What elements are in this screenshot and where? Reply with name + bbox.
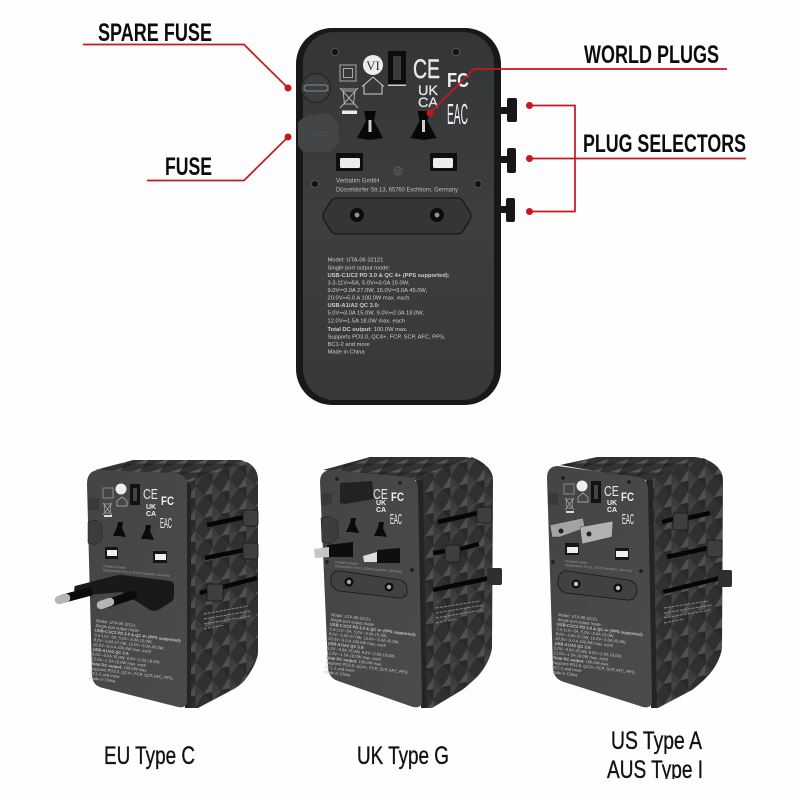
callout: plug selectors bbox=[526, 102, 746, 215]
specification text: Total DC output: 100.0W max. bbox=[91, 661, 148, 673]
specification text: Single port output mode: bbox=[557, 617, 602, 627]
white bar bbox=[342, 110, 357, 114]
specification text: 9.0V⎓3.0A 27.0W, 15.0V⎓3.0A 45.0W, bbox=[329, 631, 400, 645]
specification text: 3.3-11V⎓5A, 5.0V⎓3.0A 15.0W, bbox=[328, 280, 410, 286]
specification text: 5.0V⎓3.0A 15.0W, 9.0V⎓2.0A 18.0W, bbox=[554, 645, 623, 659]
specification text: 12.0V⎓1.5A 18.0W max. each bbox=[326, 650, 382, 662]
face marks bbox=[548, 476, 644, 574]
specification text: 3.3-11V⎓5A, 5.0V⎓3.0A 15.0W, bbox=[94, 632, 153, 644]
specification text: 9.0V⎓3.0A 27.0W, 15.0V⎓3.0A 45.0W, bbox=[94, 637, 165, 651]
specification text: Model: UTA-06 32121 bbox=[558, 612, 599, 622]
specification text: Model: UTA-06 32121 bbox=[96, 618, 137, 628]
specification text: USB-C1/C2 PD 3.0 & QC 4+ (PPS supported): bbox=[330, 622, 417, 637]
face marks: Düsseldorfer Str.13, 65760 Eschborn, Germany bbox=[565, 563, 633, 573]
top surface bbox=[95, 460, 258, 486]
specification text: Made in China bbox=[89, 675, 116, 683]
caption: AUS Type I: AUS Type I bbox=[607, 756, 703, 784]
small vent ring bbox=[394, 167, 402, 175]
side slider slots bbox=[433, 513, 490, 590]
specification text: Total DC output: 100.0W max. bbox=[326, 655, 383, 667]
specification text: USB-A1/A2 QC 3.0: bbox=[554, 641, 592, 650]
specification text: USB-A1/A2 QC 3.0: bbox=[328, 303, 380, 309]
icon: fuse cap bbox=[298, 113, 339, 152]
specification text bbox=[551, 612, 645, 685]
specification text: 9.0V⎓3.0A 27.0W, 15.0V⎓3.0A 45.0W, bbox=[556, 631, 627, 645]
specification text: Single port output mode: bbox=[328, 266, 391, 272]
adapter outer shell bbox=[296, 28, 501, 405]
UK plug blades bbox=[314, 542, 400, 563]
specification text: Made in China bbox=[551, 669, 578, 677]
callout: spare fuse: SPARE FUSE bbox=[98, 19, 212, 47]
UKCA mark: UK bbox=[418, 82, 439, 98]
top surface bbox=[560, 457, 723, 481]
specification text: 20.0V⎓5.0 A 100.0W max. each bbox=[328, 296, 409, 302]
caption: US Type A: US Type A bbox=[611, 727, 702, 755]
USB-C slot bbox=[388, 51, 406, 86]
callout: spare fuse bbox=[83, 19, 292, 92]
adapter rear panel bbox=[303, 32, 494, 400]
side slider knobs bbox=[445, 507, 492, 562]
face marks: UK bbox=[146, 504, 156, 511]
USB-A port right bbox=[430, 153, 457, 171]
diamond textured side bbox=[184, 462, 258, 708]
protruding slider knob bbox=[487, 568, 502, 585]
specification text: 20.0V⎓5.0 A 100.0W max. each bbox=[93, 642, 152, 654]
specification text: Model: UTA-06 32121 bbox=[328, 258, 383, 264]
specification text: 20.0V⎓5.0 A 100.0W max. each bbox=[555, 636, 614, 648]
callout: world plugs bbox=[426, 41, 727, 116]
diamond textured side bbox=[416, 457, 493, 708]
USB-A port left bbox=[336, 153, 363, 171]
callout: fuse: FUSE bbox=[165, 153, 212, 181]
face marks: Verbatim GmbH bbox=[335, 560, 359, 566]
specification text: BC1-2 and more bbox=[328, 342, 370, 348]
side slider knobs bbox=[207, 510, 258, 601]
specification text: Supports PD3.0, QC4+, FCP, SCP, AFC, PPS, bbox=[552, 660, 636, 675]
face marks: CA bbox=[376, 507, 386, 514]
face marks bbox=[321, 476, 414, 574]
front face bbox=[547, 466, 652, 707]
corner screws bbox=[311, 48, 482, 188]
face marks: EAC bbox=[390, 511, 402, 528]
face marks: FC bbox=[161, 496, 174, 508]
UKCA mark: CA bbox=[418, 94, 439, 110]
US plug blades bbox=[550, 518, 613, 544]
icon: fuse cap: FUSE bbox=[311, 131, 329, 138]
specification text: USB-A1/A2 QC 3.0: bbox=[327, 641, 365, 650]
specification text bbox=[324, 612, 418, 685]
specification text: 3.3-11V⎓5A, 5.0V⎓3.0A 15.0W, bbox=[556, 626, 615, 638]
callout: world plugs: WORLD PLUGS bbox=[584, 41, 719, 69]
specification text bbox=[89, 618, 183, 691]
specification text: BC1-2 and more bbox=[551, 664, 583, 673]
specification text: 12.0V⎓1.5A 18.0W max. each bbox=[553, 650, 609, 662]
plug selector knobs bbox=[500, 98, 517, 222]
top surface bbox=[323, 457, 493, 481]
specification text: Supports PD3.0, QC4+, FCP, SCP, AFC, PPS, bbox=[325, 660, 409, 675]
right socket bbox=[410, 111, 436, 140]
face marks: Verbatim GmbH bbox=[565, 559, 589, 565]
left socket bbox=[357, 111, 383, 140]
specification text: USB-C1/C2 PD 3.0 & QC 4+ (PPS supported): bbox=[95, 628, 182, 643]
FC mark: FC bbox=[447, 70, 469, 92]
manufacturer address: Düsseldorfer Str.13, 65760 Eschborn, Germany bbox=[336, 186, 459, 194]
specification text: Total DC output: 100.0W max. bbox=[328, 327, 408, 333]
icon: crossed-out bin bbox=[340, 88, 358, 108]
protruding slider knob bbox=[718, 570, 732, 587]
EU socket recess bbox=[331, 571, 407, 598]
specification text: 12.0V⎓1.5A 18.0W max. each bbox=[328, 318, 405, 324]
specification text: Supports PD3.0, QC4+, FCP, SCP, AFC, PPS, bbox=[328, 334, 446, 340]
specification text: 20.0V⎓5.0 A 100.0W max. each bbox=[328, 636, 387, 648]
adapter with EU Type C plug bbox=[59, 460, 258, 708]
icon: VI badge bbox=[363, 55, 383, 75]
icon: VI badge: VI bbox=[366, 58, 380, 73]
front face bbox=[320, 470, 422, 707]
caption: EU Type C: EU Type C bbox=[104, 742, 195, 770]
main adapter: rear view bbox=[296, 28, 517, 405]
specification text: BC1-2 and more bbox=[89, 670, 121, 679]
specification text: 5.0V⎓3.0A 15.0W, 9.0V⎓2.0A 18.0W, bbox=[328, 310, 424, 316]
specification text: USB-A1/A2 QC 3.0: bbox=[92, 647, 130, 656]
specification text: Single port output mode: bbox=[330, 617, 375, 627]
manufacturer address bbox=[336, 178, 459, 194]
side slider knobs bbox=[673, 513, 722, 557]
specification text: 12.0V⎓1.5A 18.0W max. each bbox=[91, 656, 147, 668]
adapter with EU Type C plug: EAC bbox=[160, 515, 172, 532]
icon: double insulation square bbox=[340, 65, 356, 81]
EU socket recess bbox=[558, 571, 637, 600]
specification text: Model: UTA-06 32121 bbox=[331, 612, 372, 622]
manufacturer address: Verbatim GmbH bbox=[336, 178, 379, 184]
diamond textured side bbox=[646, 458, 723, 708]
main adapter: rear view: EAC bbox=[447, 99, 468, 131]
front face bbox=[87, 470, 187, 707]
specification text: BC1-2 and more bbox=[324, 664, 356, 673]
UKCA mark bbox=[418, 82, 439, 110]
face marks: Düsseldorfer Str.13, 65760 Eschborn, Germany bbox=[103, 568, 171, 578]
specification text: 5.0V⎓3.0A 15.0W, 9.0V⎓2.0A 18.0W, bbox=[327, 645, 396, 659]
specification text: Single port output mode: bbox=[95, 623, 140, 633]
caption: UK Type G: UK Type G bbox=[357, 742, 449, 770]
specification text: USB-C1/C2 PD 3.0 & QC 4+ (PPS supported): bbox=[328, 273, 450, 279]
adapter with US Type A / AUS Type I plug bbox=[547, 457, 732, 708]
CE mark: CE bbox=[413, 54, 440, 84]
specification text bbox=[328, 258, 450, 356]
specification text: Made in China bbox=[324, 669, 351, 677]
EU socket recess bbox=[323, 198, 471, 234]
face marks: EAC bbox=[622, 511, 634, 528]
face marks: CE bbox=[604, 483, 619, 500]
face marks: CE bbox=[143, 486, 158, 503]
specification text: 3.3-11V⎓5A, 5.0V⎓3.0A 15.0W, bbox=[329, 626, 388, 638]
specification text: Made in China bbox=[328, 350, 365, 356]
callout: fuse bbox=[147, 134, 292, 181]
face marks: Düsseldorfer Str.13, 65760 Eschborn, Germany bbox=[335, 564, 403, 574]
specification text: Supports PD3.0, QC4+, FCP, SCP, AFC, PPS, bbox=[90, 666, 174, 681]
icon: house bbox=[362, 77, 384, 94]
face marks: FC bbox=[621, 492, 634, 504]
specification text: 9.0V⎓3.0A 27.0W, 15.0V⎓3.0A 45.0W, bbox=[328, 288, 428, 294]
face marks: UK bbox=[607, 500, 617, 507]
face marks: CA bbox=[607, 507, 617, 514]
specification text: USB-C1/C2 PD 3.0 & QC 4+ (PPS supported): bbox=[557, 622, 644, 637]
face marks: FC bbox=[391, 492, 404, 504]
specification text: 5.0V⎓3.0A 15.0W, 9.0V⎓2.0A 18.0W, bbox=[92, 651, 161, 665]
face marks: CA bbox=[146, 511, 156, 518]
specification text: Total DC output: 100.0W max. bbox=[553, 655, 610, 667]
face marks: Verbatim GmbH bbox=[103, 564, 127, 570]
face marks: UK bbox=[376, 500, 386, 507]
adapter with UK Type G plug bbox=[314, 457, 502, 708]
side slider slots bbox=[200, 517, 257, 593]
face marks: CE bbox=[373, 486, 388, 503]
icon: spare fuse cap bbox=[302, 74, 330, 102]
side slider slots bbox=[662, 513, 720, 592]
face marks bbox=[88, 484, 174, 578]
EU plug bbox=[59, 575, 174, 611]
